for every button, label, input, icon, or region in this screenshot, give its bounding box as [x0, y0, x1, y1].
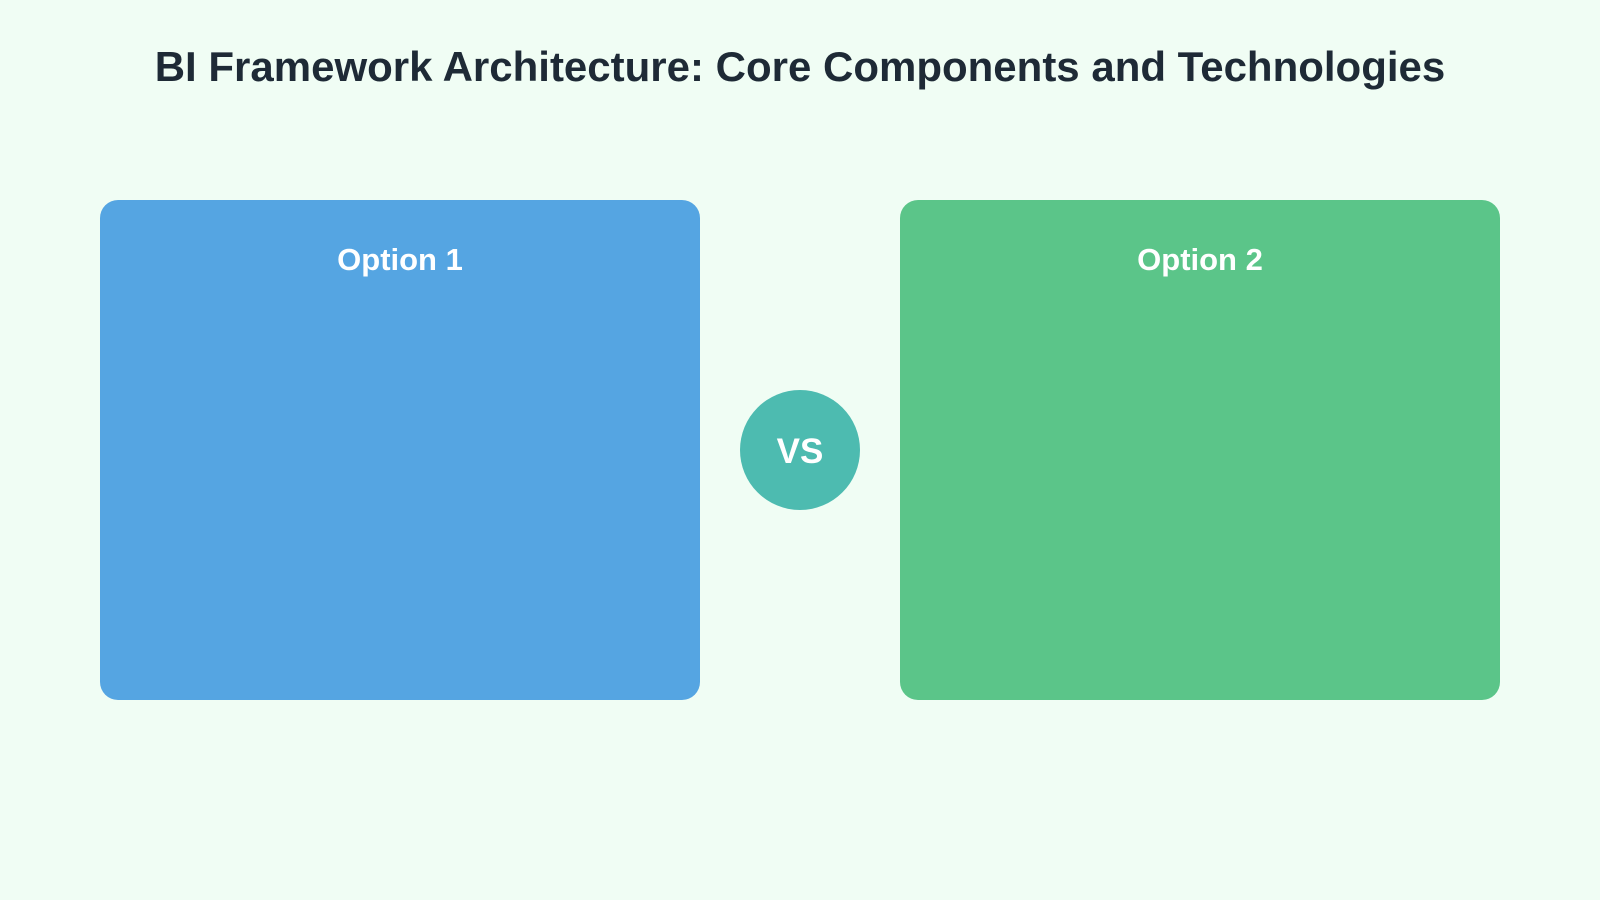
icon: vs circle: VS: [777, 432, 823, 471]
heading: option 2: Option 2: [1137, 242, 1263, 277]
icon: vs circle: [740, 390, 860, 510]
panel: option 1: [100, 200, 700, 700]
title: BI Framework Architecture: Core Components and Technologies: [155, 43, 1445, 90]
heading: option 1: Option 1: [337, 242, 463, 277]
panel: option 2: [900, 200, 1500, 700]
